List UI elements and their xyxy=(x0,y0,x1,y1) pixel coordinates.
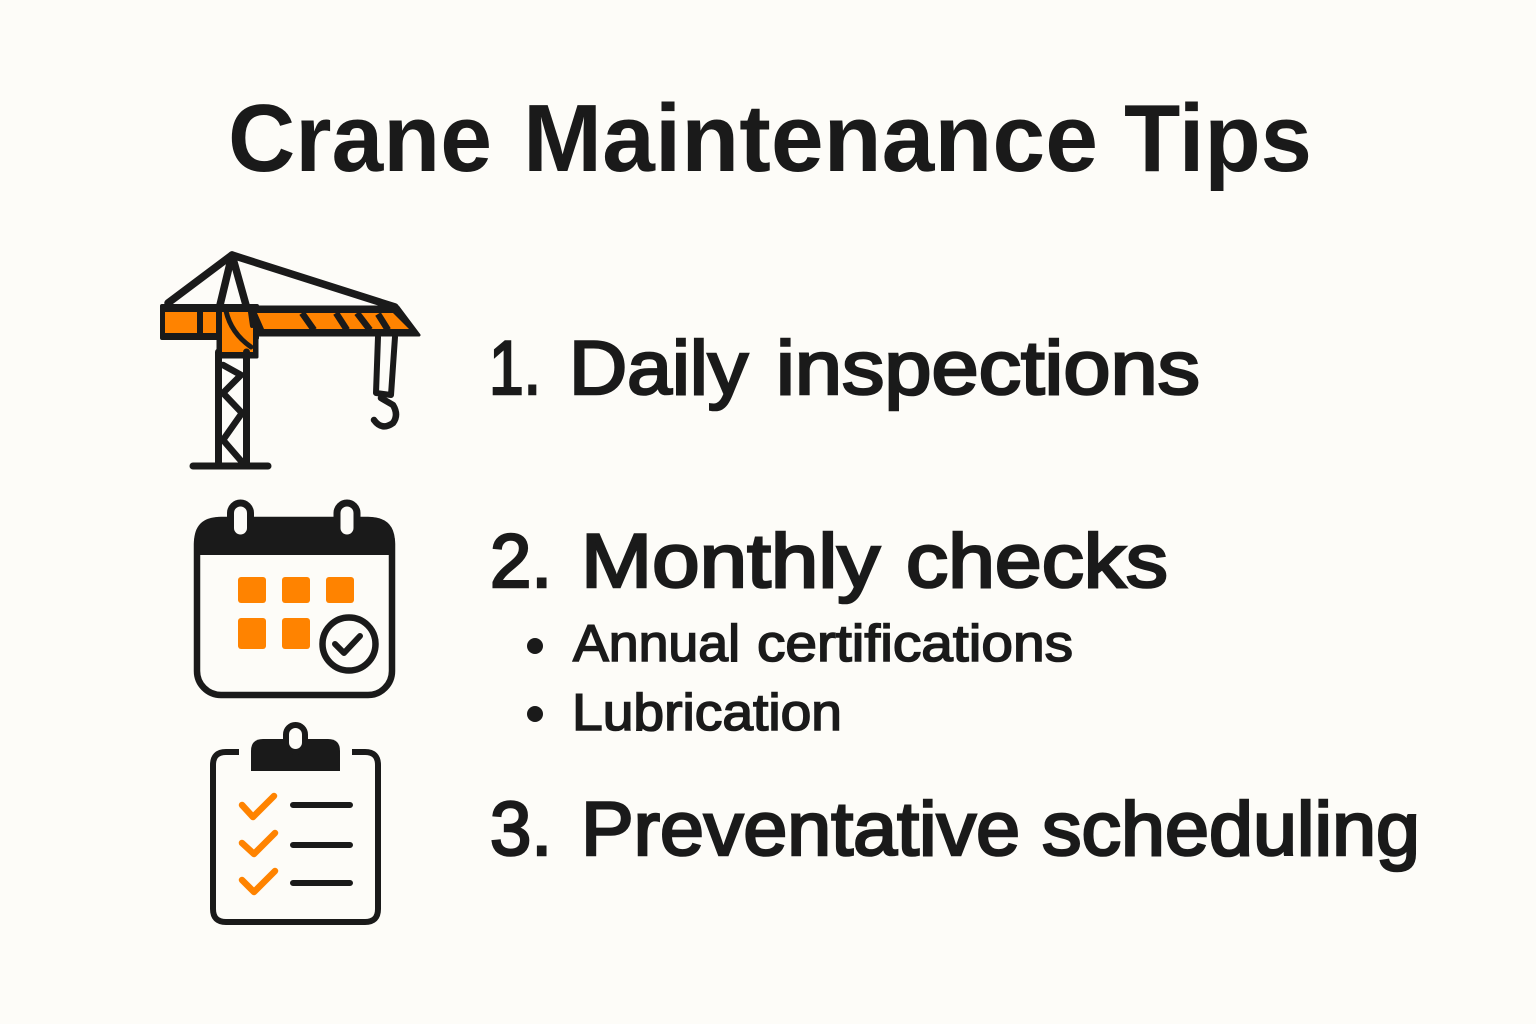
title xyxy=(228,85,1312,192)
bullet: annual certifications: certifications xyxy=(757,615,1073,673)
item 3 text: scheduling xyxy=(1042,787,1420,872)
title: Crane xyxy=(228,85,492,192)
title: Tips xyxy=(1124,85,1312,192)
bullet: annual certifications xyxy=(527,615,1073,673)
item 2 text: 2. xyxy=(490,519,552,604)
bullet: annual certifications: Annual xyxy=(573,615,740,673)
item 2 text xyxy=(490,519,1168,604)
item 2 text: checks xyxy=(906,519,1168,604)
item 1 text: inspections xyxy=(776,326,1200,411)
icon: tower crane xyxy=(162,255,419,466)
bullet: lubrication: Lubrication xyxy=(572,684,842,742)
icon: clipboard checklist xyxy=(213,725,378,922)
item 1 text: 1. xyxy=(489,326,541,411)
title: Maintenance xyxy=(523,85,1098,192)
item 3 text: Preventative xyxy=(581,787,1020,872)
item 1 text xyxy=(489,326,1200,411)
item 3 text: 3. xyxy=(490,787,552,872)
item 3 text xyxy=(490,787,1420,872)
item 1 text: Daily xyxy=(569,326,748,411)
icon: calendar xyxy=(194,503,395,695)
item 2 text: Monthly xyxy=(581,519,880,604)
